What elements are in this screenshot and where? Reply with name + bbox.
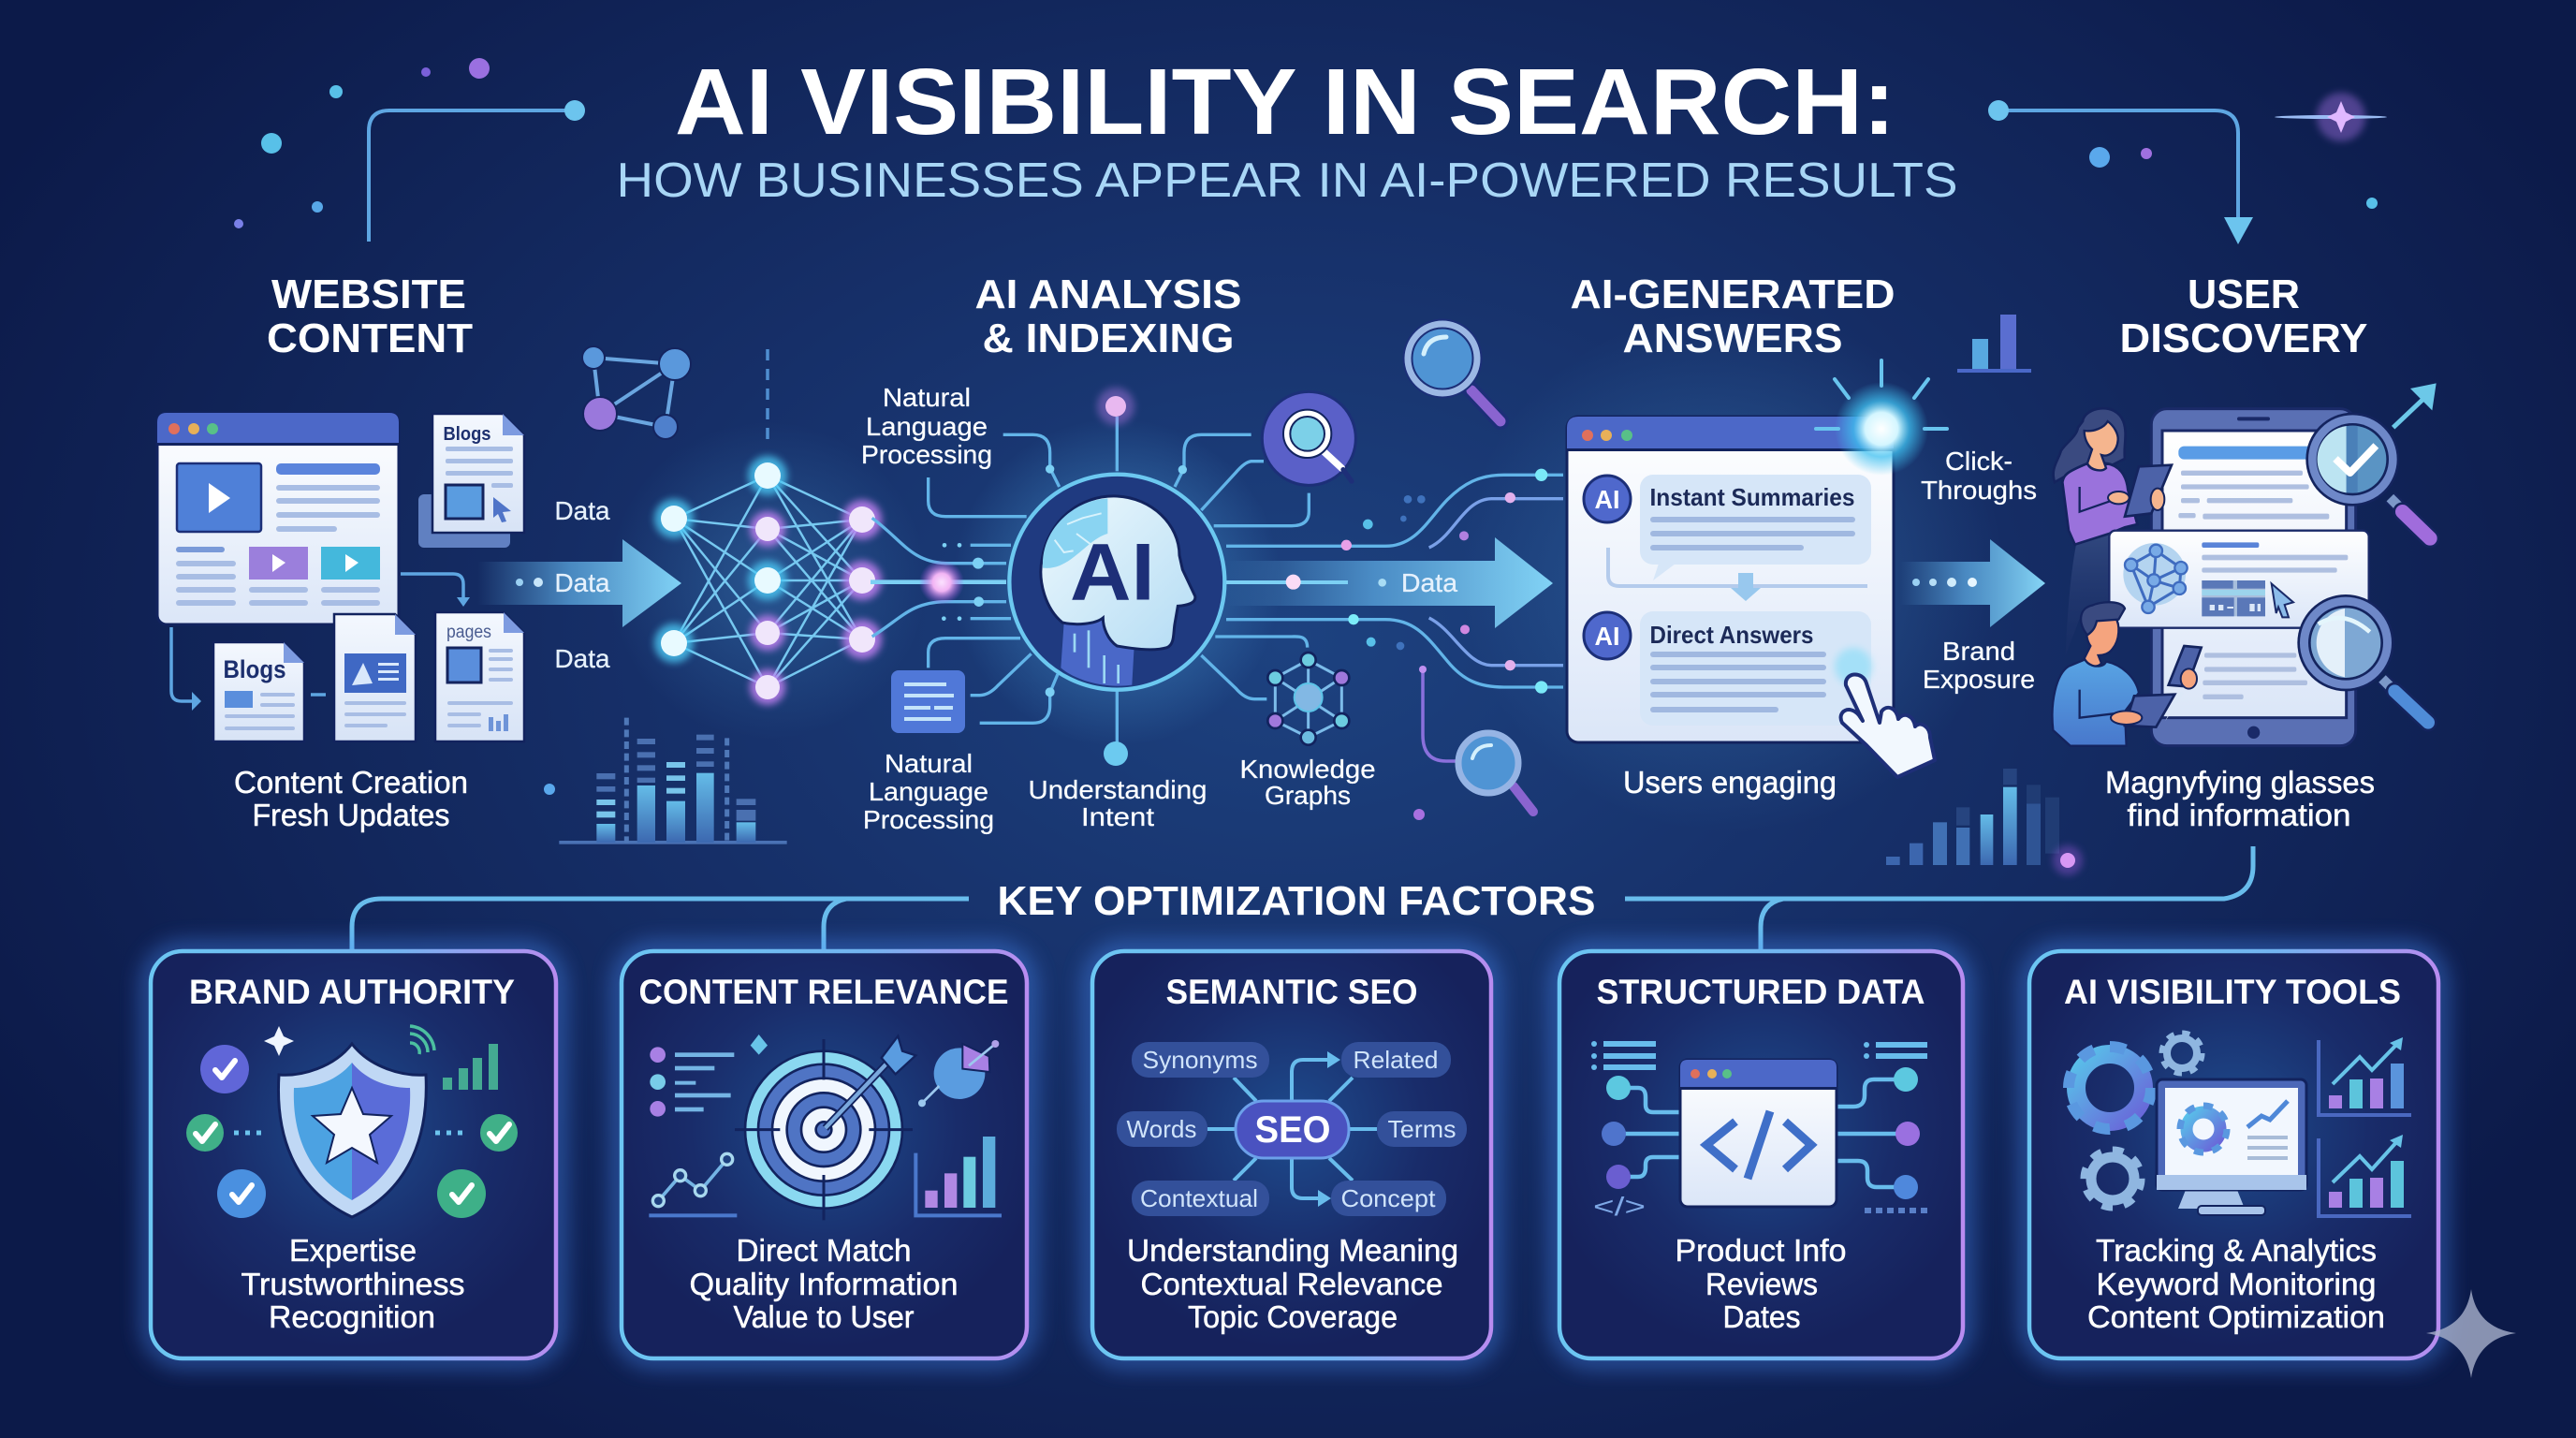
label: data top: Data [554,496,610,525]
icon: magnifier bottom right [2297,594,2428,723]
icon: blogs document bottom: Blogs [223,655,286,683]
caption: magnifying glasses [2105,765,2375,832]
node: words: Words [1127,1115,1196,1143]
icon: magnifier with check [2305,413,2430,538]
title: AI VISIBILITY IN SEARCH: [675,50,1895,154]
label: NLP bottom: Processing [863,805,994,834]
card: result on tablet [2109,531,2369,628]
panel: structured data: Product Info [1676,1233,1846,1268]
icon: tablet with results [2151,409,2356,746]
heading: website content: WEBSITE [271,271,466,317]
icon: blogs document bottom [213,642,304,741]
icon: small network graph [582,346,691,439]
node: seo [1236,1101,1349,1158]
panel: ai visibility tools: Keyword Monitoring [2097,1267,2376,1301]
label: knowledge graphs: Graphs [1265,781,1351,810]
node: synonyms: Synonyms [1142,1046,1258,1074]
subtitle: HOW BUSINESSES APPEAR IN AI-POWERED RESULTS [616,154,1958,208]
icon: sparkle, signal and bars [264,1026,498,1090]
label: NLP top: Processing [861,440,992,469]
answer card: direct answers [1584,611,1871,726]
answer card: instant summaries: AI [1595,485,1619,514]
panel: content relevance [622,951,1027,1358]
panel: structured data: Reviews [1705,1267,1818,1301]
heading: website content [267,271,473,361]
panel: ai visibility tools: AI VISIBILITY TOOLS [2064,973,2401,1011]
data flow dots [1286,469,1547,694]
answer card: direct answers: Direct Answers [1649,621,1814,649]
icon: line graph [649,1153,737,1217]
node: seo: SEO [1254,1109,1331,1151]
heading: ai analysis [975,271,1241,361]
icon: man with phone [2052,602,2202,746]
heading: ai-generated answers [1571,271,1895,361]
node: concept [1331,1181,1446,1216]
dot near right chart [2053,845,2083,875]
icon: chart top [2319,1037,2411,1115]
heading: website content: CONTENT [267,315,473,361]
node bottom [1104,741,1128,766]
label: NLP bottom: Language [869,777,988,806]
heading: user discovery: USER [2188,271,2300,317]
icon: pages document [435,612,524,741]
heading: key optimization factors: KEY OPTIMIZATION FACTORS [998,878,1595,924]
node: contextual [1132,1181,1269,1216]
label: brand exposure: Brand [1942,637,2015,666]
icon: target with arrow [735,1036,915,1220]
node: terms [1377,1111,1467,1147]
panel: semantic seo [1092,951,1491,1358]
icon: pointing hand [1835,648,1935,777]
connector: top left [369,100,585,242]
decorative dots and sparkle top right [2089,93,2387,209]
node: contextual: Contextual [1140,1184,1258,1212]
label: click-throughs: Throughs [1921,476,2037,505]
icon: monitor [2157,1079,2306,1215]
icon: bar chart [915,1137,1002,1215]
connector: top right arrow [1988,100,2253,244]
icon: magnifier in purple circle [1262,391,1355,485]
icon: corner sparkle watermark [2426,1289,2516,1378]
panel: ai visibility tools: Content Optimization [2087,1299,2385,1334]
icon: data nodes [1591,1041,1928,1211]
dot near left chart [544,784,555,795]
node: synonyms [1132,1042,1269,1078]
node: related [1341,1042,1451,1078]
arrow: AI core to answers [1226,537,1553,628]
pink node left of AI core [919,560,964,605]
icon: floating magnifier top [1408,324,1500,421]
panel: semantic seo: SEMANTIC SEO [1166,973,1417,1011]
icon: small code tag: </> [1593,1192,1646,1221]
caption: content creation [234,765,468,832]
caption: magnifying glasses: Magnyfying glasses [2105,765,2375,800]
decorative bar chart right [1886,769,2059,865]
label: knowledge graphs: Knowledge [1239,755,1376,784]
arrow: website to network: Data [554,568,610,597]
node: words [1117,1111,1208,1147]
panel: brand authority: BRAND AUTHORITY [189,973,515,1011]
icon: blogs document top: Blogs [444,424,490,445]
icon: pages document: pages [446,623,491,642]
node top [1097,388,1134,425]
data flow curves [1226,475,1563,687]
circuits [1614,1079,1908,1187]
panel: semantic seo: Contextual Relevance [1140,1267,1443,1301]
panel: content relevance: Quality Information [689,1267,959,1301]
icon: code window [1680,1060,1837,1207]
caption: content creation: Content Creation [234,765,468,800]
panel: semantic seo: Topic Coverage [1188,1299,1398,1334]
label: knowledge graphs [1239,755,1376,810]
arrows between documents [171,574,470,711]
answer card: direct answers: AI [1595,622,1619,651]
icon: list bullets [650,1034,768,1117]
arrow: website to network [477,539,681,627]
panel: structured data [1559,951,1963,1358]
caption: content creation: Fresh Updates [253,798,449,832]
icon: knowledge graph [1267,653,1349,745]
panel: semantic seo: Understanding Meaning [1127,1233,1458,1268]
label: understanding intent [1028,775,1208,831]
label: understanding intent: Intent [1081,802,1154,831]
icon: glowing orb [1816,360,1947,476]
node: concept: Concept [1340,1184,1436,1212]
AI core head: AI [1070,528,1155,618]
node: terms: Terms [1387,1115,1456,1143]
connector lines to key factors [352,846,2253,951]
answer window panel [1460,309,2003,833]
decorative bar chart left [559,718,787,844]
panel: ai visibility tools: Tracking & Analytics [2096,1233,2377,1268]
label: NLP top [861,383,992,469]
node: related: Related [1354,1046,1438,1074]
AI core head [1009,475,1224,690]
panel: brand authority: Trustworthiness [242,1267,464,1301]
arrow: upward growth [2393,383,2437,428]
icon: blogs document top [418,414,524,548]
caption: users engaging: Users engaging [1623,765,1837,800]
heading: ai analysis: & INDEXING [983,315,1234,361]
icon: article document [334,614,416,741]
user discovery illustration [2052,383,2437,746]
panel: structured data: STRUCTURED DATA [1597,973,1925,1011]
label: data bottom: Data [554,644,610,673]
dashed vertical line [766,349,769,440]
heading: ai-generated answers: AI-GENERATED [1571,271,1895,317]
panel: brand authority: Recognition [269,1299,435,1334]
decorative dots top left [234,58,490,228]
icon: woman with tablet [2054,408,2172,655]
icon: NLP document [891,670,965,733]
icon: chart bottom [2319,1135,2411,1216]
panel: ai visibility tools [2029,951,2438,1358]
caption: magnifying glasses: find information [2127,798,2351,832]
answer card: instant summaries: Instant Summaries [1649,483,1855,511]
AI core glow [953,418,1281,746]
label: NLP bottom [863,749,994,834]
label: NLP top: Natural [883,383,971,412]
panel: content relevance: CONTENT RELEVANCE [638,973,1009,1011]
label: understanding intent: Understanding [1028,775,1208,804]
label: brand exposure: Exposure [1923,665,2035,694]
label: brand exposure [1923,637,2035,694]
icon: website browser window [157,413,399,624]
icon: pie chart [918,1040,999,1107]
label: click-throughs [1921,447,2037,505]
panel: brand authority: Expertise [289,1233,417,1268]
label: NLP bottom: Natural [885,749,973,778]
panel: content relevance: Direct Match [736,1233,912,1268]
label: NLP top: Language [866,412,988,441]
icon: gears [2069,1034,2202,1207]
label: click-throughs: Click- [1945,447,2012,476]
heading: ai-generated answers: ANSWERS [1623,315,1842,361]
panel: brand authority [151,951,556,1358]
AI core circuits [871,417,1309,742]
panel: structured data: Dates [1722,1299,1801,1334]
connectors around seo [1208,1051,1377,1207]
panel: content relevance: Value to User [734,1299,915,1334]
heading: user discovery [2119,271,2368,361]
heading: user discovery: DISCOVERY [2119,315,2368,361]
icon: small bar chart top [1957,315,2031,373]
neural network [608,421,927,740]
arrow: AI core to answers: Data [1401,568,1457,597]
arrow: answers to discovery [1900,539,2045,627]
icon: floating magnifier bottom [1413,666,1533,820]
heading: ai analysis: AI ANALYSIS [975,271,1241,317]
icon: shield with star [278,1044,426,1217]
answer card: instant summaries [1584,476,1855,550]
icon: check badges [186,1045,518,1218]
